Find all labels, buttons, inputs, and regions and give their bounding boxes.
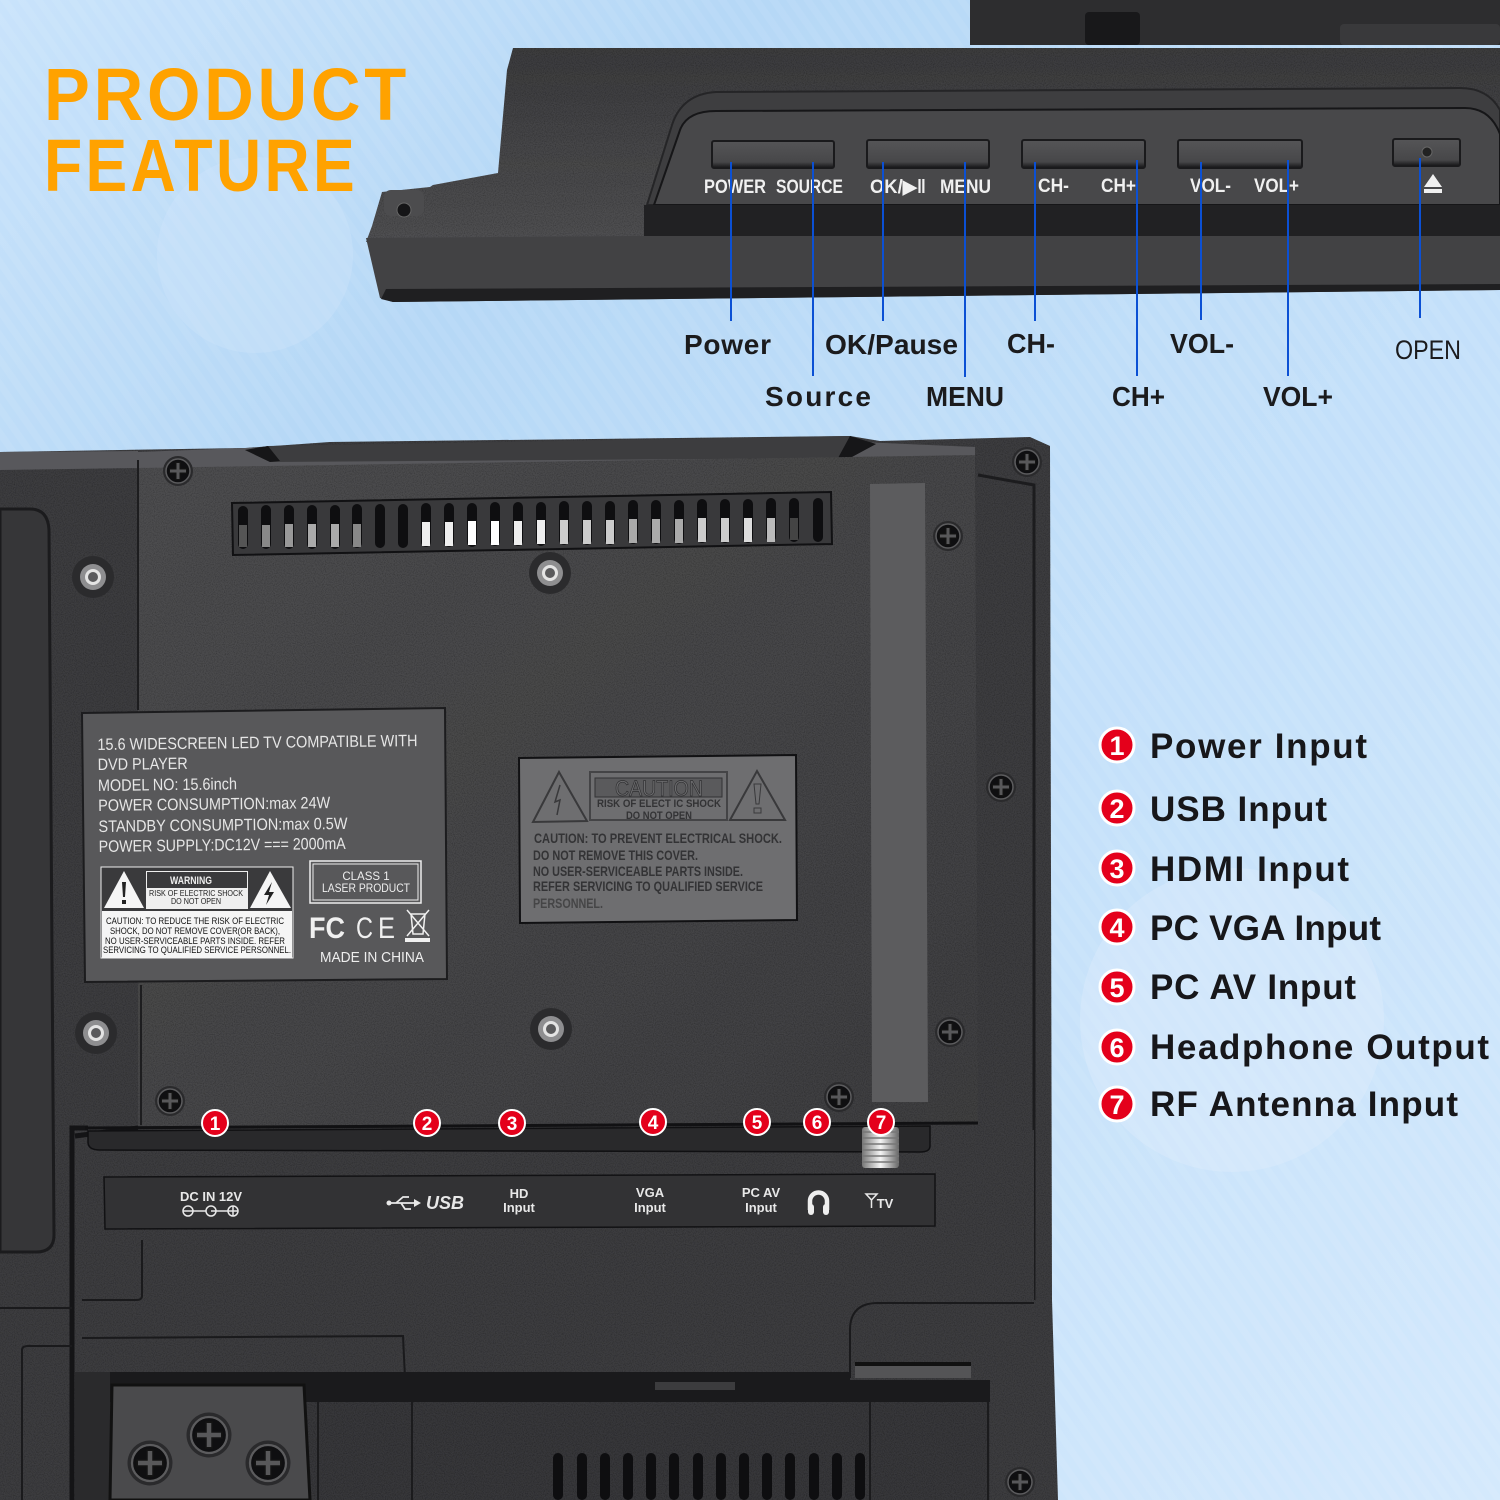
control labels: OK/Pause — [825, 329, 958, 360]
long strip — [870, 483, 928, 1102]
legend item 2: USB Input — [1150, 790, 1327, 829]
panel: top control strip of TV — [366, 0, 1500, 302]
button captions: POWER — [704, 177, 766, 198]
legend item 7: 7 — [1109, 1090, 1125, 1120]
button captions: MENU — [940, 177, 991, 198]
warning sticker: SERVICING TO QUALIFIED SERVICE PERSONNEL. — [103, 945, 291, 955]
port numbers — [210, 1113, 886, 1135]
legend item 2: 2 — [1109, 794, 1125, 824]
port groove — [88, 1126, 930, 1152]
lower left recess lines — [0, 1240, 1034, 1500]
bottom latch — [655, 1362, 971, 1390]
legend item 4: 4 — [1109, 913, 1125, 943]
port captions: PC AV — [742, 1185, 780, 1200]
legend item 7: RF Antenna Input — [1150, 1085, 1458, 1124]
button captions: CH+ — [1101, 176, 1136, 197]
caution plate: PERSONNEL. — [533, 895, 603, 911]
control labels: VOL+ — [1263, 381, 1333, 412]
port captions: Input — [745, 1200, 778, 1215]
label specification text: MODEL NO: 15.6inch — [98, 775, 237, 795]
port numbers: 5 — [752, 1113, 763, 1134]
control labels: CH+ — [1112, 381, 1165, 412]
port captions — [180, 1185, 894, 1216]
bracket — [110, 1385, 310, 1500]
icon: antenna TV — [866, 1194, 877, 1208]
control labels: Power — [684, 329, 771, 360]
panel: TV rear — [0, 436, 1058, 1500]
class 1 laser box: CLASS 1 — [342, 871, 390, 883]
mounting screw — [384, 190, 424, 217]
warning sticker: RISK OF ELECTRIC SHOCK — [149, 889, 244, 898]
port numbers: 2 — [422, 1114, 432, 1135]
label specification text: 15.6 WIDESCREEN LED TV COMPATIBLE WITH — [97, 732, 418, 754]
port captions: HD — [510, 1186, 528, 1201]
legend item 6: 6 — [1109, 1033, 1125, 1063]
vent top — [232, 492, 832, 555]
bracket screws — [128, 1412, 290, 1486]
lower rear section — [75, 1402, 990, 1500]
port captions: Input — [503, 1200, 536, 1215]
recessed button panel — [644, 88, 1500, 236]
warning sticker: DO NOT OPEN — [171, 897, 221, 906]
legend item 1: 1 — [1109, 731, 1125, 761]
right side bevel — [978, 475, 1034, 1300]
control labels: Source — [765, 381, 871, 412]
callout lines: top controls — [731, 158, 1420, 377]
caution plate: CAUTION: TO PREVENT ELECTRICAL SHOCK. — [534, 830, 782, 846]
control labels: OPEN — [1395, 335, 1461, 365]
made in china: MADE IN CHINA — [320, 950, 424, 966]
warning sticker: NO USER-SERVICEABLE PARTS INSIDE. REFER — [105, 936, 285, 946]
legend item 1: Power Input — [1150, 727, 1367, 766]
port numbers: 1 — [210, 1114, 221, 1135]
plate shadow — [85, 1123, 978, 1128]
warning sticker — [101, 867, 293, 958]
icon: USB — [386, 1197, 421, 1209]
legend item 6: Headphone Output — [1150, 1028, 1489, 1067]
section lines — [318, 1402, 988, 1500]
port captions: TV — [877, 1196, 894, 1211]
shadow left column — [75, 1372, 110, 1500]
stand behind the TV — [970, 0, 1500, 45]
plate divider — [138, 460, 141, 1125]
title: FEATURE — [44, 124, 358, 207]
label specification text: STANDBY CONSUMPTION:max 0.5W — [98, 815, 348, 836]
legend item 3: 3 — [1109, 854, 1125, 884]
left inset panel — [0, 509, 54, 1252]
control labels: CH- — [1007, 328, 1055, 359]
button captions: SOURCE — [776, 177, 843, 198]
plate frame edge — [72, 1128, 138, 1500]
caution plate — [519, 755, 797, 923]
title — [44, 53, 410, 207]
legend item 5: PC AV Input — [1150, 968, 1356, 1007]
port captions: DC IN 12V — [180, 1189, 242, 1204]
control labels: VOL- — [1170, 328, 1234, 359]
button captions: VOL+ — [1254, 176, 1299, 197]
warning sticker: SHOCK, DO NOT REMOVE COVER(OR BACK), — [110, 926, 280, 936]
legend item 5: 5 — [1109, 973, 1125, 1003]
connector: RF antenna — [862, 1127, 899, 1168]
label specification text: DVD PLAYER — [98, 755, 188, 774]
port numbers: 3 — [507, 1114, 517, 1135]
certification marks: C — [356, 912, 373, 945]
label specification text: POWER SUPPLY:DC12V === 2000mA — [99, 835, 346, 856]
warning sticker: WARNING — [170, 875, 212, 887]
main plate — [138, 455, 978, 1128]
TV top housing — [366, 48, 1500, 242]
port number badges — [202, 1109, 894, 1136]
icon: headphones — [808, 1192, 829, 1215]
caution plate: NO USER-SERVICEABLE PARTS INSIDE. — [533, 863, 743, 879]
label specification text — [97, 732, 419, 856]
caution plate: DO NOT OPEN — [626, 810, 692, 822]
front lip — [366, 233, 1500, 302]
button captions: VOL- — [1190, 176, 1231, 197]
lower housing — [75, 1130, 1034, 1400]
mounting washers — [72, 552, 572, 1054]
caution plate: DO NOT REMOVE THIS COVER. — [533, 847, 698, 863]
class 1 laser box — [310, 861, 421, 903]
open button dot — [1422, 147, 1432, 157]
label specification text: POWER CONSUMPTION:max 24W — [98, 794, 331, 815]
caution plate: RISK OF ELECT IC SHOCK — [597, 798, 721, 810]
port numbers: 6 — [812, 1113, 822, 1134]
button captions: OK/▶‖ — [870, 177, 926, 198]
warning sticker: CAUTION: TO REDUCE THE RISK OF ELECTRIC — [106, 916, 284, 926]
screws — [155, 447, 1042, 1498]
icon: DC polarity — [183, 1206, 238, 1216]
legend: ports — [1100, 727, 1489, 1124]
top highlight edge — [0, 442, 975, 480]
button captions: CH- — [1038, 176, 1069, 197]
ridge ends — [245, 436, 876, 462]
certification marks: E — [378, 912, 395, 945]
port numbers: 4 — [648, 1113, 659, 1134]
port captions: USB — [426, 1193, 464, 1213]
certification marks — [309, 910, 430, 945]
top ridge — [245, 436, 876, 462]
button captions — [704, 176, 1299, 198]
port captions: Input — [634, 1200, 667, 1215]
lower vent — [553, 1453, 865, 1500]
port captions: VGA — [636, 1185, 665, 1200]
bottom shadow band — [75, 1372, 990, 1402]
port label strip — [104, 1174, 935, 1229]
caution plate: CAUTION — [615, 776, 703, 801]
port numbers: 7 — [876, 1113, 886, 1134]
legend item 3: HDMI Input — [1150, 850, 1349, 889]
control labels — [684, 328, 1461, 412]
certification marks: FC — [309, 912, 345, 945]
buttons — [712, 139, 1460, 168]
rating label — [82, 708, 447, 982]
class 1 laser box: LASER PRODUCT — [322, 883, 410, 895]
title: PRODUCT — [44, 53, 410, 136]
icon: eject — [1424, 174, 1442, 193]
control labels: MENU — [926, 381, 1004, 412]
rear housing — [0, 436, 1058, 1500]
legend item 4: PC VGA Input — [1150, 909, 1381, 948]
caution plate: REFER SERVICING TO QUALIFIED SERVICE — [533, 878, 763, 894]
